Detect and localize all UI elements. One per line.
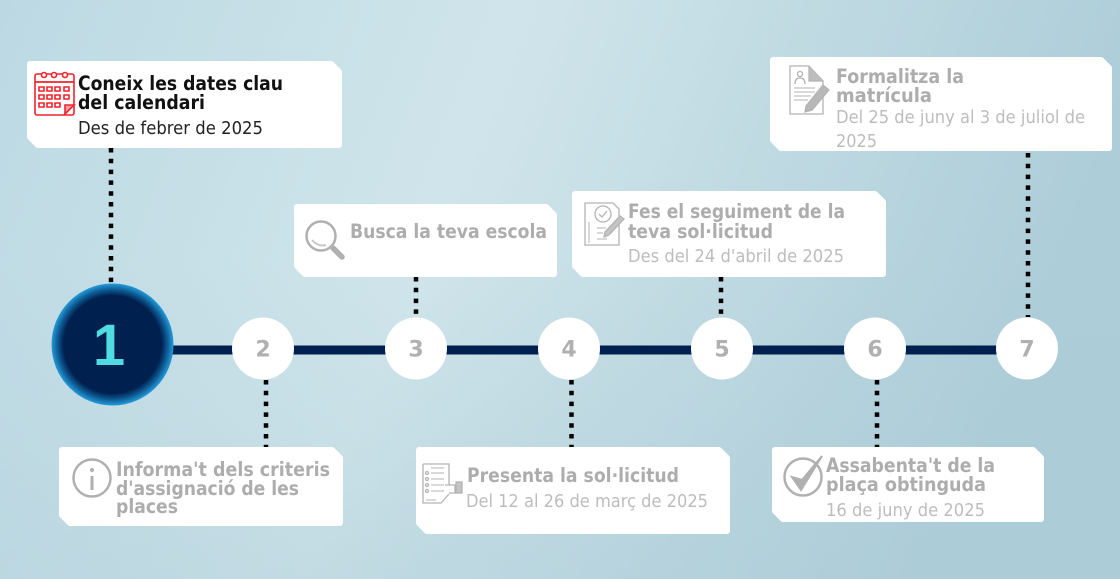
date: Del 25 de juny al 3 de juliol de [836, 108, 1085, 128]
heading: places [116, 495, 178, 518]
heading: Formalitza la [836, 65, 964, 88]
icon: document with pencil [790, 66, 829, 114]
connector 4 [569, 380, 574, 447]
step 3 marker: 3 [408, 338, 424, 362]
panel: step 3 [297, 207, 554, 274]
heading: Fes el seguiment de la [628, 200, 845, 223]
icon: check circle [784, 456, 822, 496]
heading [826, 454, 995, 496]
heading: Busca la teva escola [350, 220, 547, 243]
step 2 marker [232, 318, 294, 380]
step 5 marker [691, 318, 753, 380]
heading: Coneix les dates clau [78, 72, 283, 95]
panel: step 1 [30, 64, 339, 145]
heading [836, 65, 964, 107]
icon: calendar [35, 72, 74, 115]
icon: checked document [585, 203, 624, 245]
connector 1 [109, 148, 113, 284]
date: 2025 [836, 132, 877, 152]
step 5 marker: 5 [714, 338, 730, 362]
date: 16 de juny de 2025 [826, 501, 985, 521]
step 4 marker: 4 [561, 338, 577, 362]
panel: step 2 [62, 450, 340, 523]
heading: d'assignació de les [116, 477, 299, 500]
heading: matrícula [836, 84, 932, 107]
connector 2 [264, 380, 268, 447]
date: Des de febrer de 2025 [78, 119, 263, 139]
panel: step 4 [419, 450, 727, 531]
heading [628, 200, 845, 243]
icon: form with hand [423, 464, 462, 503]
step 7 marker: 7 [1019, 338, 1035, 362]
heading [116, 458, 330, 518]
heading: Presenta la sol·licitud [467, 464, 679, 487]
step 6 marker [844, 318, 906, 380]
panel: step 6 [775, 450, 1041, 521]
heading: del calendari [78, 91, 205, 114]
connector 6 [875, 380, 879, 447]
date: Des del 24 d'abril de 2025 [628, 247, 844, 267]
connector 3 [414, 277, 418, 316]
step 7 marker [996, 318, 1058, 380]
timeline line [165, 346, 1005, 354]
step 1 marker [52, 284, 174, 406]
heading: Informa't dels criteris [116, 458, 330, 481]
step 2 marker: 2 [255, 338, 271, 362]
step 6 marker: 6 [867, 338, 883, 362]
connector 7 [1026, 153, 1030, 317]
step 3 marker [385, 318, 447, 380]
icon: magnifier [306, 222, 342, 257]
heading: Assabenta't de la [826, 454, 995, 477]
heading: teva sol·licitud [628, 220, 773, 243]
heading [78, 72, 283, 114]
icon: info [74, 460, 110, 496]
date [836, 108, 1085, 152]
connector 5 [719, 277, 723, 318]
panel: step 5 [575, 194, 883, 274]
heading: plaça obtinguda [826, 473, 986, 496]
step 4 marker [538, 318, 600, 380]
panel: step 7 [773, 60, 1109, 152]
date: Del 12 al 26 de març de 2025 [466, 492, 708, 512]
step 1 marker: 1 [93, 313, 125, 378]
